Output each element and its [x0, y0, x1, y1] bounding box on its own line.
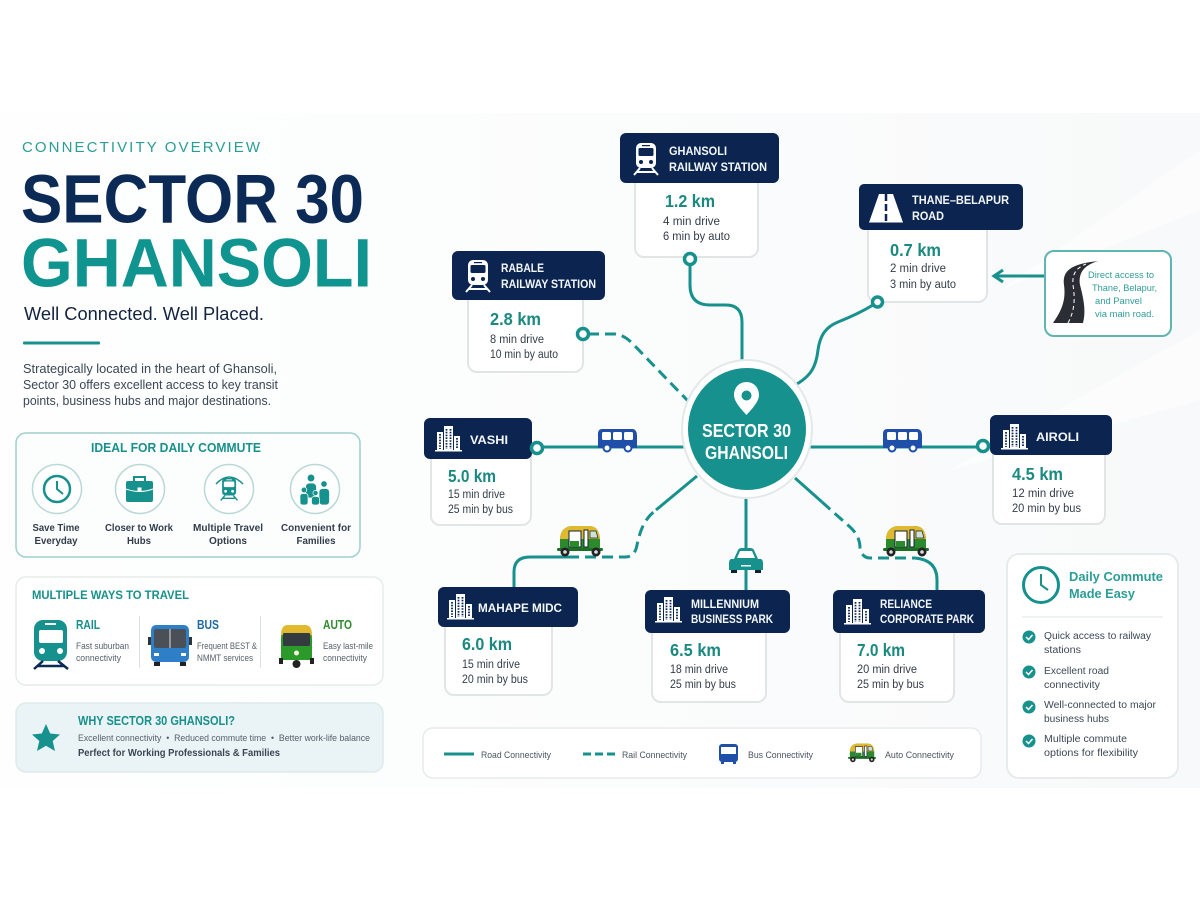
icon: star — [32, 724, 60, 751]
card: airoli: 12 min drive — [1012, 488, 1074, 500]
card: thane-belapur road — [859, 184, 1023, 307]
legend: bus: Bus Connectivity — [748, 750, 813, 761]
label: save time everyday: Save Time — [32, 522, 80, 534]
card: ghansoli railway station: RAILWAY STATION — [669, 160, 767, 174]
text: rail — [76, 618, 129, 664]
icon: bus on airoli line — [883, 429, 922, 452]
panel: ideal for daily commute: Hubs — [127, 535, 151, 547]
card: vashi — [424, 418, 542, 525]
connector: rabale station — [588, 334, 688, 401]
card: reliance corporate park: 7.0 km — [857, 640, 905, 660]
item: railway stations: Quick access to railway — [1044, 631, 1151, 642]
card: millennium business park: BUSINESS PARK — [691, 612, 773, 626]
panel: ideal for daily commute: Options — [209, 535, 247, 547]
card: rabale railway station — [452, 251, 605, 372]
heading: daily commute: Daily Commute — [1069, 569, 1163, 584]
heading: daily commute: Made Easy — [1069, 586, 1136, 601]
card: thane-belapur road: 0.7 km — [890, 240, 941, 260]
icon: location pin — [734, 382, 759, 415]
card: rabale railway station: 10 min by auto — [490, 349, 558, 361]
card: ghansoli railway station: 6 min by auto — [663, 231, 730, 243]
intro paragraph: Strategically located in the heart of Ghansoli, — [23, 362, 277, 376]
icon: auto on reliance line — [883, 526, 929, 556]
card: mahape midc: 6.0 km — [462, 634, 512, 654]
card: reliance corporate park: 20 min drive — [857, 664, 917, 676]
item: railway stations: stations — [1044, 645, 1081, 656]
card: thane-belapur road: THANE–BELAPUR — [912, 193, 1009, 207]
card: millennium business park: 18 min drive — [670, 664, 728, 676]
panel: daily commute made easy — [1007, 554, 1178, 778]
card: mahape midc: 20 min by bus — [462, 674, 528, 686]
icon: clock — [32, 464, 82, 514]
heading: ideal for daily commute: IDEAL FOR DAILY COMMUTE — [91, 440, 261, 455]
legend: auto — [848, 744, 954, 762]
text: auto — [323, 618, 373, 664]
tagline: Well Connected. Well Placed. — [24, 304, 264, 324]
card: reliance corporate park: 25 min by bus — [857, 679, 924, 691]
card: rabale railway station: 8 min drive — [490, 334, 544, 346]
background panel — [0, 113, 1200, 788]
heading: daily commute — [1069, 569, 1163, 601]
icon: train — [634, 143, 658, 175]
icon: building — [447, 594, 474, 620]
connector: mahape road section — [656, 476, 697, 510]
icon: car — [729, 548, 763, 573]
audience line: Perfect for Working Professionals & Families — [78, 747, 280, 759]
heading: why: WHY SECTOR 30 GHANSOLI? — [78, 714, 235, 728]
connector: ghansoli station — [690, 262, 742, 361]
card: millennium business park: 25 min by bus — [670, 679, 736, 691]
item: commute options: Multiple commute — [1044, 734, 1127, 745]
card: ghansoli railway station: GHANSOLI — [669, 144, 727, 158]
card: rabale railway station: 2.8 km — [490, 309, 541, 329]
icon: train — [204, 464, 254, 514]
intro paragraph: Sector 30 offers excellent access to key transit — [23, 378, 279, 392]
icon: train — [466, 260, 490, 292]
legend — [423, 728, 981, 778]
card: vashi: 25 min by bus — [448, 504, 513, 516]
card: mahape midc: 15 min drive — [462, 659, 520, 671]
item: road connectivity: Excellent road — [1044, 666, 1109, 677]
connector: reliance end — [915, 558, 937, 590]
benefits line: Excellent connectivity • Reduced commute time • Better work-life balance — [78, 733, 370, 744]
text: bus: NMMT services — [197, 653, 253, 664]
icon: winding road — [1053, 261, 1098, 323]
item: commute options — [1022, 734, 1138, 759]
title: sector 30: SECTOR 30 — [21, 161, 364, 238]
callout: direct access — [1045, 251, 1171, 336]
arrow: callout to road — [994, 270, 1046, 282]
icon: bus — [148, 625, 192, 666]
legend: bus — [719, 744, 813, 764]
card: millennium business park: MILLENNIUM — [691, 597, 759, 611]
label: closer to work hubs: Closer to Work — [105, 522, 173, 534]
card: mahape midc: MAHAPE MIDC — [478, 601, 562, 615]
icon: auto on mahape line — [557, 526, 603, 556]
text: bus — [197, 618, 258, 664]
heading: multiple ways: MULTIPLE WAYS TO TRAVEL — [32, 588, 189, 602]
text: bus: BUS — [197, 618, 219, 632]
hub: sector 30 ghansoli: SECTOR 30 — [702, 421, 791, 441]
connector: mahape rail section — [568, 510, 656, 557]
icon: auto — [279, 625, 314, 668]
card: rabale railway station: RAILWAY STATION — [501, 277, 596, 291]
eyebrow: connectivity overview: CONNECTIVITY OVERVIEW — [22, 139, 261, 156]
label: multiple travel options: Multiple Travel — [193, 522, 263, 534]
text: auto: connectivity — [323, 653, 367, 664]
title: ghansoli: GHANSOLI — [21, 225, 372, 302]
legend: road — [444, 750, 551, 761]
connector: thane-belapur road — [797, 305, 873, 384]
panel: ideal for daily commute: Families — [296, 535, 336, 547]
icon: rail — [34, 620, 68, 669]
card: vashi: 15 min drive — [448, 489, 505, 501]
connector: airoli — [810, 446, 978, 448]
icon: family — [290, 464, 340, 514]
text: rail: Fast suburban — [76, 641, 129, 652]
card: thane-belapur road: 3 min by auto — [890, 279, 956, 291]
icon: building — [435, 426, 462, 452]
callout: direct access: Direct access to — [1088, 270, 1154, 281]
callout: direct access: and Panvel — [1095, 296, 1142, 307]
item: business hubs: Well-connected to major — [1044, 700, 1157, 711]
item: business hubs: business hubs — [1044, 714, 1109, 725]
connector: millennium — [744, 497, 748, 590]
item: railway stations — [1022, 630, 1151, 656]
text: auto: Easy last-mile — [323, 641, 373, 652]
item: road connectivity: connectivity — [1044, 680, 1100, 691]
legend: road: Road Connectivity — [481, 750, 551, 761]
label: convenient for families: Convenient for — [281, 522, 351, 534]
card: reliance corporate park — [833, 590, 985, 702]
icon: building — [844, 599, 871, 624]
legend: rail — [583, 750, 687, 761]
icon: clock — [1024, 568, 1058, 602]
connector: vashi — [542, 446, 684, 448]
card: thane-belapur road: ROAD — [912, 209, 944, 223]
panel: ideal for daily commute — [16, 433, 360, 557]
callout: direct access: Thane, Belapur, — [1092, 283, 1157, 294]
intro paragraph — [23, 362, 279, 408]
connector: reliance rail section — [822, 502, 915, 558]
card: airoli: 20 min by bus — [1012, 503, 1081, 515]
panel: why sector 30 ghansoli — [16, 703, 383, 772]
item: business hubs — [1022, 700, 1157, 725]
card: millennium business park: 6.5 km — [670, 640, 721, 660]
text: rail: RAIL — [76, 618, 100, 632]
card: ghansoli railway station — [620, 133, 779, 264]
card: airoli — [978, 415, 1112, 524]
card: thane-belapur road: 2 min drive — [890, 263, 946, 275]
panel: ideal for daily commute: Everyday — [34, 535, 78, 547]
hub: sector 30 ghansoli: GHANSOLI — [705, 443, 788, 463]
icon: road — [869, 194, 903, 222]
card: mahape midc — [438, 587, 578, 695]
icon: bus on vashi line — [598, 429, 637, 452]
card: airoli: AIROLI — [1036, 430, 1079, 444]
connector: mahape — [514, 557, 568, 587]
card: rabale railway station: RABALE — [501, 261, 544, 275]
text: rail: connectivity — [76, 653, 121, 664]
icon: building — [1001, 424, 1028, 450]
card: ghansoli railway station: 4 min drive — [663, 216, 720, 228]
card: reliance corporate park: CORPORATE PARK — [880, 612, 974, 626]
text: bus: Frequent BEST & — [197, 641, 258, 652]
legend: rail: Rail Connectivity — [622, 750, 687, 761]
card: millennium business park — [645, 590, 790, 702]
connector: reliance road section — [795, 478, 822, 502]
icon: building — [655, 597, 682, 622]
panel: multiple ways to travel — [16, 577, 383, 685]
icon: briefcase — [116, 464, 164, 514]
legend: auto: Auto Connectivity — [885, 750, 954, 761]
hub: sector 30 ghansoli — [682, 360, 812, 498]
card: airoli: 4.5 km — [1012, 464, 1063, 484]
intro paragraph: points, business hubs and major destinations. — [23, 394, 271, 408]
card: vashi: 5.0 km — [448, 466, 496, 486]
card: vashi: VASHI — [470, 433, 508, 447]
callout: direct access: via main road. — [1095, 309, 1154, 320]
item: commute options: options for flexibility — [1044, 748, 1138, 759]
card: reliance corporate park: RELIANCE — [880, 597, 932, 611]
text: auto: AUTO — [323, 618, 352, 632]
card: ghansoli railway station: 1.2 km — [665, 191, 715, 211]
item: road connectivity — [1022, 666, 1109, 691]
